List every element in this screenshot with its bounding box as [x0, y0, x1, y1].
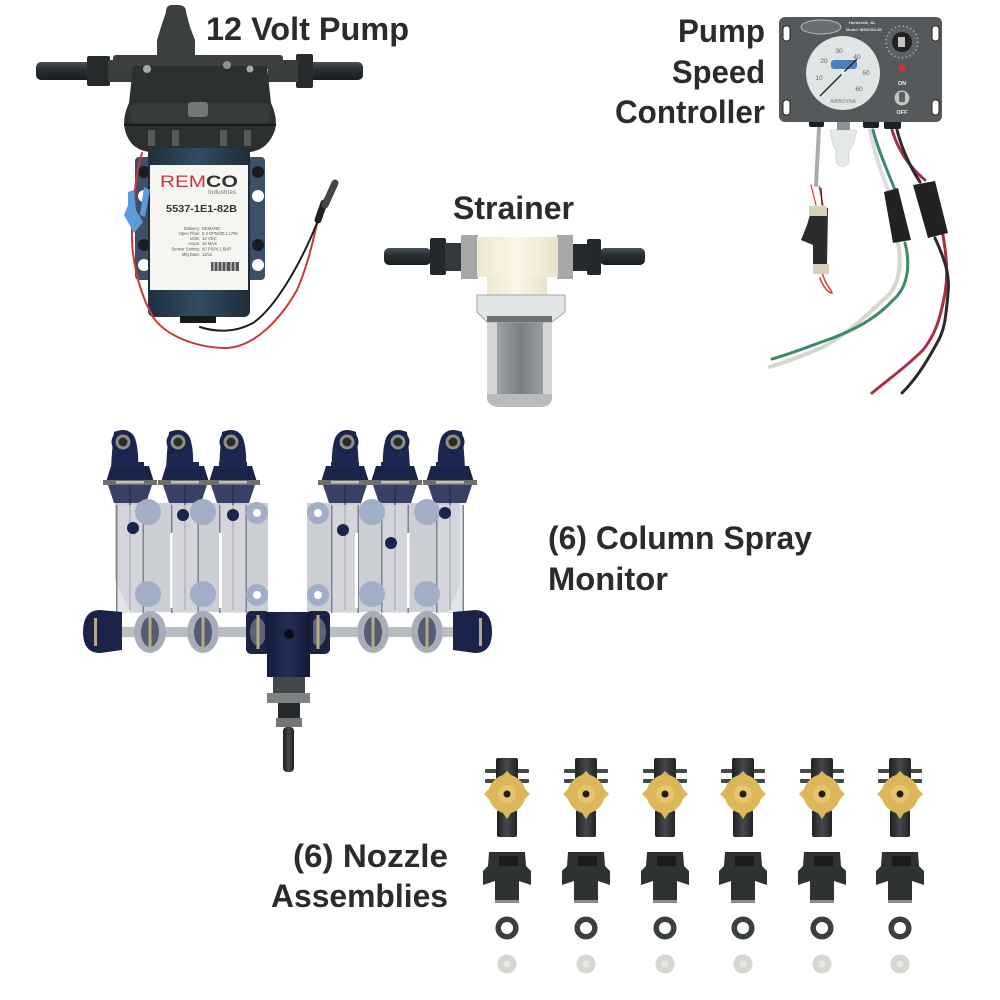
heading: (6) Column Spray Monitor: (6) Column Spray	[548, 520, 812, 556]
strainer: strainer drawing	[384, 235, 645, 407]
icon: tee fitting	[265, 612, 313, 677]
label: REMCO sticker: 12/11	[202, 252, 213, 257]
icon: white push fitting	[830, 130, 857, 166]
panel: controller housing: Model: M25CSS-66	[846, 27, 883, 32]
chart: gauge dial	[806, 36, 880, 110]
icon: right barb	[572, 239, 645, 275]
icon: clear panels	[115, 503, 460, 612]
heading: Pump Speed Controller: Pump	[678, 13, 765, 49]
icon: wire connectors	[801, 181, 948, 274]
label: REMCO sticker: Delivery:	[184, 226, 200, 231]
label: REMCO sticker: Sensor Setting:	[171, 246, 200, 252]
pump: 12 volt pump photo drawing	[36, 5, 363, 348]
nozzles: six nozzle assemblies	[483, 758, 924, 974]
chart: gauge dial: 60	[855, 86, 863, 93]
chart: gauge dial: 40	[853, 54, 861, 61]
icon: controller wires	[770, 128, 948, 393]
icon: left barb	[384, 238, 462, 275]
icon: pump head	[113, 55, 283, 152]
heading: (6) Column Spray Monitor	[548, 520, 812, 597]
chart: gauge dial: 50	[862, 70, 870, 77]
label: REMCO sticker: 12 VDC	[202, 236, 217, 241]
icon: clear bowl	[477, 295, 565, 407]
icon: toggle switch	[894, 90, 910, 106]
label: REMCO sticker: 5.3 GPM/20.1 LPM	[202, 231, 238, 236]
heading: (6) Nozzle Assemblies: (6) Nozzle	[293, 838, 448, 874]
heading: (6) Nozzle Assemblies	[271, 838, 448, 914]
label: REMCO sticker: DEMAND	[202, 226, 220, 231]
panel: controller housing	[779, 17, 942, 122]
icon: speed knob	[886, 26, 918, 58]
icon: outlet stem	[267, 677, 310, 772]
icon: indicator balls	[127, 507, 451, 549]
label: REMCO sticker: Volts:	[190, 236, 200, 241]
heading: Pump Speed Controller: Speed	[672, 54, 765, 90]
heading: (6) Nozzle Assemblies: Assemblies	[271, 878, 448, 914]
icon: top outlet nipple	[157, 5, 195, 70]
chart: gauge dial: 20	[820, 58, 828, 65]
controller: pump speed controller drawing	[770, 17, 948, 393]
label: REMCO sticker: Open Flow:	[179, 231, 200, 236]
label: REMCO sticker: Industries	[208, 189, 237, 196]
icon: blue crimp connectors	[124, 187, 150, 233]
label: REMCO sticker: REM	[160, 172, 206, 191]
icon: manifold	[83, 610, 492, 654]
heading: Strainer: Strainer	[453, 190, 574, 226]
label: REMCO sticker: Amps:	[188, 241, 200, 246]
icon: six flow columns	[103, 430, 477, 613]
icon: clear bolt rings	[135, 499, 440, 607]
label: REMCO sticker: 16 MAX	[202, 241, 217, 246]
label: REMCO sticker: 5537-1E1-82B	[166, 204, 237, 215]
chart: gauge dial: 10	[815, 75, 823, 82]
heading: Pump Speed Controller: Controller	[615, 94, 765, 130]
label: REMCO sticker: 60 PSI/4.1 BAR	[202, 246, 231, 252]
icon: cable glands	[809, 120, 901, 130]
chart: gauge dial: 30	[835, 48, 843, 55]
label: REMCO sticker	[150, 165, 248, 290]
panel: controller housing: ON	[898, 81, 906, 87]
icon: left hose barb	[36, 56, 138, 86]
icon: right hose barb	[268, 54, 363, 88]
icon: motor cylinder	[148, 148, 250, 323]
monitor: spray monitor drawing	[83, 430, 492, 772]
label: REMCO sticker: CO	[206, 172, 238, 191]
chart: gauge dial: AIRBOYNA	[830, 99, 857, 105]
heading: (6) Column Spray Monitor: Monitor	[548, 561, 668, 597]
icon: strainer body	[461, 235, 573, 297]
panel: controller housing: OFF	[896, 110, 908, 116]
icon: pump mounting bracket	[135, 157, 265, 280]
panel: controller housing: Huntsville, AL	[849, 20, 876, 25]
icon: indicator LED	[898, 64, 906, 72]
heading: Pump Speed Controller	[615, 13, 765, 130]
label: REMCO sticker: Mfg Date:	[182, 252, 200, 257]
icon: red and black wires	[132, 153, 335, 348]
heading: 12 Volt Pump: 12 Volt Pump	[206, 11, 409, 47]
